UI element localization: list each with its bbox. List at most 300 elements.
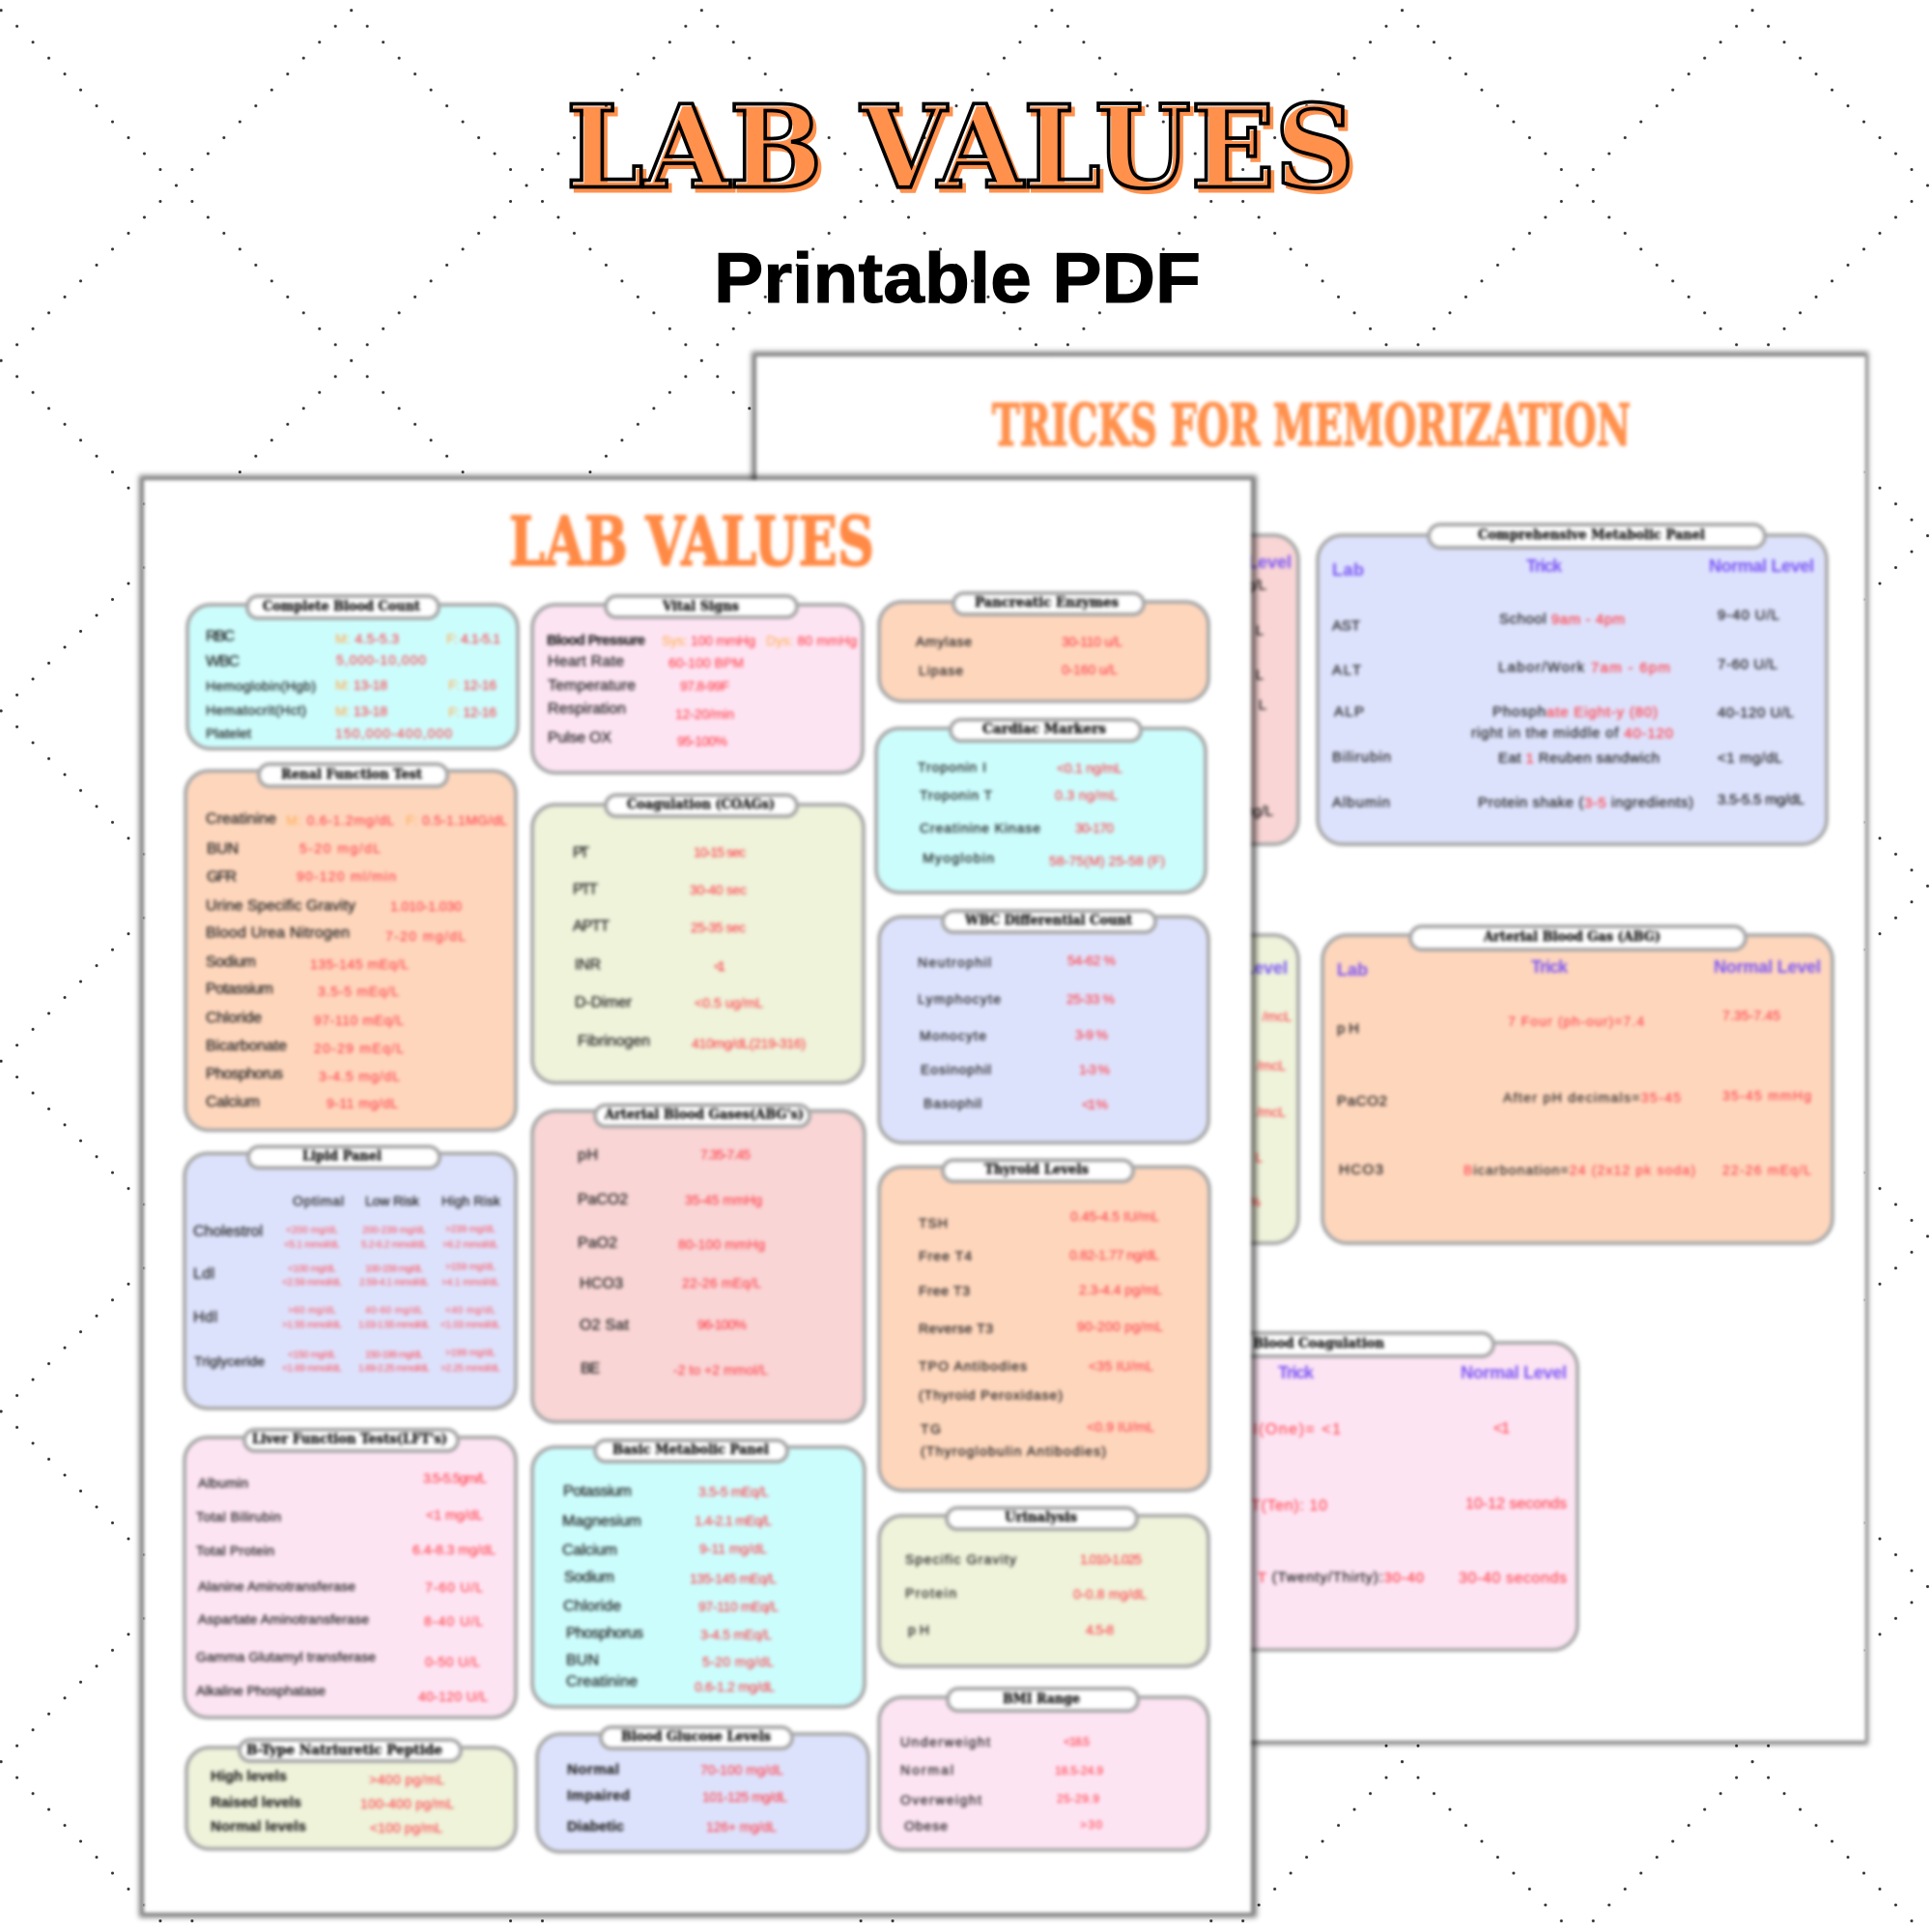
- panel background: [532, 605, 863, 773]
- lab rows: 20-29 mEq/L: [314, 1040, 404, 1056]
- panel: rose panel, mostly hidden: g/L: [1246, 578, 1266, 593]
- lab rows: Potassium: [206, 981, 273, 997]
- lipid rows: Hdl: [193, 1310, 217, 1325]
- panel: rose panel, mostly hidden: L: [1256, 667, 1264, 684]
- panel background: [187, 605, 518, 749]
- lab rows: 126+ mg/dL: [706, 1819, 777, 1834]
- lab rows: Fibrinogen: [578, 1034, 650, 1049]
- panel: WBC differential count: [879, 911, 1208, 1143]
- lab rows: Aspartate Aminotransferase: [198, 1611, 369, 1627]
- lab rows: [211, 1768, 454, 1835]
- panel background: [185, 771, 516, 1130]
- lab rows: BUN: [566, 1652, 599, 1669]
- panel title pill: Renal Function Test: [281, 767, 422, 782]
- table rows: Labor/Work 7am - 6pm: [1498, 659, 1670, 676]
- panel background: [876, 728, 1206, 893]
- lab rows: Pulse OX: [548, 730, 611, 746]
- lipid rows: <200 mg/dL: [286, 1225, 338, 1236]
- table rows: 7-60 U/L: [1718, 657, 1777, 672]
- table rows: [1332, 607, 1804, 811]
- panel: green panel, mostly hidden: [966, 935, 1298, 1243]
- lipid rows: <40 mg/dL: [445, 1306, 496, 1316]
- column headers: High Risk: [441, 1193, 501, 1208]
- lab rows: Sodium: [564, 1569, 614, 1586]
- lab rows: <1: [714, 958, 725, 974]
- lab rows: Hemoglobin(Hgb): [206, 678, 316, 694]
- panel title pill: Pancreatic Enzymes: [975, 595, 1119, 611]
- lipid rows: 40-60 mg/dL: [365, 1306, 423, 1316]
- lab rows: 0.45-4.5 IU/mL: [1070, 1208, 1159, 1224]
- panel title pill: [948, 1689, 1138, 1711]
- lab rows: 35-45 mmHg: [685, 1192, 762, 1208]
- lab rows: [919, 1208, 1163, 1459]
- panel: rose panel, mostly hidden: L: [1259, 697, 1266, 713]
- column headers: Optimal: [293, 1193, 344, 1208]
- lipid rows: Cholestrol: [193, 1223, 263, 1240]
- lab rows: Diabetic: [567, 1818, 624, 1835]
- lab rows: [916, 634, 1122, 678]
- panel title pill: Vital Signs: [662, 599, 739, 614]
- lab rows: PaO2: [578, 1235, 617, 1252]
- lab rows: 22-26 mEq/L: [682, 1275, 761, 1291]
- lab rows: Free T3: [919, 1283, 970, 1298]
- lab rows: 30-170: [1075, 820, 1114, 836]
- lab rows: Basophil: [923, 1095, 981, 1111]
- panel title pill: [244, 1430, 458, 1451]
- lab rows: Eosinophil: [921, 1062, 991, 1077]
- lipid rows: >1.55 mmol/dL: [282, 1320, 342, 1331]
- lab rows: [573, 844, 806, 1051]
- table rows: T(Ten): 10: [1251, 1497, 1327, 1515]
- lab rows: <35 IU/mL: [1089, 1358, 1153, 1374]
- panel: comprehensive metabolic panel: [1318, 525, 1827, 844]
- lab rows: Respiration: [548, 701, 626, 717]
- lab rows: 3.5-5 mEq/L: [698, 1484, 769, 1499]
- lab rows: 5-20 mg/dL: [299, 840, 381, 856]
- lab rows: (Thyroid Peroxidase): [919, 1387, 1063, 1403]
- lab rows: High levels: [211, 1768, 287, 1785]
- lab rows: 97-110 mEq/L: [314, 1012, 404, 1028]
- panel: B-type natriuretic peptide: [186, 1740, 516, 1849]
- panel: rose panel, mostly hidden: Level: [1247, 553, 1292, 572]
- lab rows: 96-100%: [697, 1317, 747, 1332]
- lab rows: Urine Specific Gravity: [206, 898, 355, 914]
- panel title pill: [1140, 1333, 1493, 1356]
- table rows: ALP: [1334, 703, 1364, 721]
- panel: basic metabolic panel: [532, 1440, 865, 1707]
- lab rows: 12-20/min: [675, 706, 734, 722]
- lab rows: INR: [575, 956, 601, 974]
- lab rows: [206, 628, 500, 741]
- panel title pill: Lipid Panel: [302, 1149, 382, 1164]
- panel title pill: Urinalysis: [1005, 1510, 1077, 1525]
- lipid rows: <1.69 mmol/dL: [282, 1364, 342, 1374]
- table rows: Phosphate Eight-y (80): [1492, 703, 1658, 721]
- lab rows: 40-120 U/L: [418, 1689, 488, 1704]
- table header: [1278, 1363, 1567, 1382]
- panel title pill: Liver Function Tests(LFT's): [252, 1432, 447, 1447]
- lipid rows: <2.59 mmol/dL: [282, 1277, 342, 1289]
- lab rows: [918, 759, 1165, 868]
- lab rows: <0.5 ug/mL: [695, 995, 763, 1010]
- table rows: T (Twenty/Thirty):30-40: [1258, 1569, 1424, 1586]
- lab rows: 100-400 pg/mL: [360, 1796, 454, 1811]
- lipid rows: >60 mg/dL: [288, 1306, 336, 1316]
- table header: [1337, 957, 1821, 980]
- panel title pill: [953, 593, 1144, 614]
- lab rows: TPO Antibodies: [919, 1358, 1027, 1374]
- lab rows: Phosphorus: [206, 1066, 283, 1082]
- lab rows: >400 pg/mL: [369, 1772, 444, 1787]
- panel title pill: Blood Glucose Levels: [621, 1729, 771, 1745]
- table rows: pH: [1337, 1020, 1359, 1037]
- lab rows: Bicarbonate: [206, 1037, 287, 1055]
- lab rows: 3-4.5 mEq/L: [700, 1627, 772, 1642]
- lab rows: Impaired: [567, 1787, 630, 1804]
- lab rows: M: 13-18: [335, 703, 387, 719]
- lab rows: Lipase: [919, 663, 963, 678]
- panel title pill: [1410, 926, 1746, 950]
- lab rows: 3.5-5.5gm/L: [423, 1470, 487, 1486]
- lab rows: Free T4: [919, 1248, 972, 1264]
- lipid rows: Ldl: [193, 1265, 214, 1283]
- lab rows: 7.35-7.45: [700, 1147, 751, 1162]
- lab rows: Calcium: [562, 1542, 617, 1559]
- title: LAB VALUES: LAB VALUES: [566, 79, 1354, 214]
- lab rows: [562, 1484, 779, 1694]
- lab rows: [905, 1551, 1147, 1637]
- lab rows: Alkaline Phosphatase: [196, 1683, 326, 1698]
- lab rows: Specific Gravity: [905, 1551, 1016, 1567]
- lab rows: 70-100 mg/dL: [700, 1762, 783, 1777]
- lab rows: Chloride: [563, 1598, 621, 1615]
- lab rows: Blood Urea Nitrogen: [206, 925, 350, 941]
- panel: green panel, mostly hidden: /mcL: [1263, 1009, 1292, 1024]
- lab rows: F: 0.5-1.1MG/dL: [406, 812, 507, 828]
- lab rows: Sys: 100 mmHg: [662, 633, 755, 648]
- lab rows: 18.5-24.9: [1055, 1764, 1103, 1777]
- panel title pill: Thyroid Levels: [984, 1162, 1089, 1178]
- panel background: [879, 1697, 1208, 1850]
- lab rows: Monocyte: [920, 1028, 986, 1043]
- panel title pill: Arterial Blood Gases(ABG's): [604, 1107, 804, 1122]
- panel title pill: Basic Metabolic Panel: [612, 1442, 769, 1458]
- lab rows: BUN: [207, 840, 239, 858]
- lipid rows: <100 mg/dL: [288, 1264, 336, 1275]
- table rows: 10-12 seconds: [1465, 1495, 1567, 1513]
- panel background: [1063, 1343, 1577, 1650]
- panel title pill: Arterial Blood Gas (ABG): [1483, 929, 1661, 945]
- lab rows: 25-35 sec: [691, 920, 746, 935]
- lab rows: F: 12-16: [448, 704, 497, 720]
- lab rows: 0.6-1.2 mg/dL: [695, 1679, 775, 1694]
- panel: vital signs: [532, 596, 863, 773]
- lab rows: 135-145 mEq/L: [690, 1571, 777, 1586]
- front page heading: LAB VALUES: [509, 501, 874, 582]
- lab rows: 1.010-1.025: [1080, 1551, 1142, 1567]
- lab rows: pH: [908, 1622, 929, 1637]
- lab rows: APTT: [573, 918, 610, 935]
- lab rows: Albumin: [198, 1475, 248, 1491]
- panel title pill: Blood Coagulation: [1253, 1336, 1384, 1351]
- panel title pill: [606, 596, 797, 617]
- lipid rows: >4.1 mmol/dL: [441, 1277, 499, 1289]
- panel: green panel, mostly hidden: Level: [1243, 958, 1288, 978]
- panel background: [879, 917, 1208, 1143]
- panel background: [532, 1447, 865, 1707]
- panel title pill: [601, 1727, 792, 1748]
- table rows: Bilirubin: [1332, 750, 1391, 765]
- lab rows: 7-20 mg/dL: [385, 928, 466, 944]
- table rows: PaCO2: [1337, 1094, 1387, 1109]
- panel title pill: [1429, 525, 1765, 548]
- lab rows: 25-33 %: [1066, 991, 1115, 1007]
- back page shadow: [752, 352, 1868, 1745]
- table rows: Protein shake (3-5 ingredients): [1478, 794, 1693, 811]
- lab rows: Heart Rate: [548, 653, 624, 670]
- lipid rows: 1.69-2.25 mmol/dL: [358, 1364, 430, 1374]
- panel title pill: Complete Blood Count: [263, 599, 420, 614]
- lab rows: 2.3-4.4 pg/mL: [1079, 1282, 1162, 1297]
- panel: cardiac markers: [876, 720, 1206, 893]
- lab rows: 80-100 mmHg: [678, 1236, 765, 1252]
- lab rows: 3.5-5 mEq/L: [318, 983, 399, 999]
- lipid rows: <150 mg/dL: [288, 1350, 336, 1360]
- table rows: [1251, 1420, 1567, 1586]
- table rows: School 9am - 4pm: [1499, 611, 1625, 628]
- lab rows: M: 0.6-1.2mg/dL: [286, 812, 394, 828]
- panel background: [185, 1153, 516, 1408]
- lab rows: TG: [921, 1421, 941, 1436]
- lab rows: Normal: [567, 1762, 619, 1777]
- lab rows: 9-11 mg/dL: [327, 1095, 398, 1111]
- lab rows: >30: [1080, 1818, 1102, 1832]
- lipid rows: [193, 1223, 500, 1374]
- panel: pancreatic enzymes: [879, 593, 1208, 701]
- lab rows: 1.4-2.1 mEq/L: [695, 1513, 772, 1528]
- table header: Normal Level: [1709, 556, 1814, 576]
- lab rows: 5-20 mg/dL: [702, 1654, 774, 1669]
- panel background: [537, 1734, 868, 1852]
- lab rows: Chloride: [206, 1010, 262, 1026]
- lab rows: Magnesium: [562, 1513, 641, 1530]
- lab rows: 410mg/dL(219-316): [692, 1036, 806, 1051]
- lab rows: [900, 1734, 1103, 1833]
- table rows: 9-40 U/L: [1718, 607, 1779, 624]
- table rows: <1 mg/dL: [1718, 750, 1782, 767]
- lab rows: HCO3: [580, 1275, 623, 1293]
- panel background: [186, 1747, 516, 1849]
- panel title pill: WBC Differential Count: [964, 913, 1132, 928]
- table rows: [1337, 1008, 1811, 1179]
- lab rows: WBC: [206, 653, 240, 670]
- panel background: [532, 1111, 865, 1422]
- lab rows: RBC: [206, 628, 235, 645]
- panel: coagulation: [532, 795, 864, 1083]
- lab rows: F: 12-16: [448, 677, 497, 693]
- lab rows: Hematocrit(Hct): [206, 702, 306, 718]
- lab rows: Creatinine Kinase: [920, 820, 1040, 836]
- page: tricks for memorization: [756, 356, 1865, 1741]
- lab rows: O2 Sat: [580, 1318, 630, 1333]
- table rows: 22-26 mEq/L: [1722, 1162, 1811, 1178]
- panel: rose panel, mostly hidden: [966, 535, 1298, 844]
- panel: urinalysis: [879, 1508, 1208, 1666]
- panel title pill: [595, 1440, 787, 1462]
- lab rows: 5,000-10,000: [336, 652, 426, 668]
- lab rows: 0.3 ng/mL: [1055, 787, 1118, 803]
- lab rows: -2 to +2 mmol/L: [673, 1362, 768, 1378]
- panel: renal function test: [185, 764, 516, 1130]
- lab rows: <0.9 IU/mL: [1087, 1419, 1154, 1435]
- lab rows: 54-62 %: [1067, 952, 1116, 968]
- panel: green panel, mostly hidden: /mcL: [1257, 1058, 1286, 1073]
- panel background: [532, 805, 864, 1083]
- lab rows: Total Protein: [196, 1543, 274, 1558]
- lipid rows: Triglyceride: [194, 1353, 265, 1369]
- lipid rows: 1.03-1.55 mmol/dL: [358, 1320, 430, 1331]
- lab rows: 3-9 %: [1075, 1027, 1108, 1042]
- lipid rows: 5.2-6.2 mmol/dL: [361, 1240, 427, 1250]
- panel background: [879, 1516, 1208, 1666]
- lab rows: 3-4.5 mg/dL: [319, 1068, 400, 1084]
- lab rows: 0-160 u/L: [1062, 662, 1118, 677]
- table rows: AST: [1332, 618, 1360, 634]
- lab rows: 150,000-400,000: [335, 725, 452, 741]
- lab rows: 58-75(M) 25-58 (F): [1049, 853, 1165, 868]
- panel: rose panel, mostly hidden: L: [1256, 622, 1264, 639]
- lab rows: M: 13-18: [335, 677, 387, 693]
- lab rows: Obese: [904, 1818, 948, 1833]
- lipid rows: <1.03 mmol/dL: [440, 1320, 500, 1331]
- lab rows: Calcium: [206, 1094, 260, 1111]
- lab rows: Underweight: [900, 1734, 990, 1749]
- panel title pill: [951, 720, 1141, 741]
- panel title pill: [947, 1508, 1137, 1529]
- lab rows: Troponin I: [918, 759, 986, 775]
- panel background: [1318, 535, 1827, 844]
- lab rows: Reverse T3: [919, 1321, 993, 1336]
- lab rows: Gamma Glutamyl transferase: [196, 1649, 376, 1664]
- lab rows: Temperature: [548, 678, 636, 694]
- lipid rows: 100-159 mg/dL: [365, 1264, 423, 1275]
- lab rows: [547, 632, 857, 749]
- lab rows: <1 mg/dL: [426, 1507, 483, 1522]
- panel title pill: [240, 1740, 461, 1761]
- table rows: 7.35-7.45: [1722, 1008, 1780, 1023]
- lab rows: TSH: [919, 1215, 948, 1231]
- lab rows: 9-11 mg/dL: [699, 1541, 767, 1556]
- panel: thyroid levels: [879, 1160, 1209, 1491]
- lab rows: 10-15 sec: [694, 844, 746, 860]
- table header: Lab: [1337, 960, 1368, 980]
- panel title pill: [247, 596, 439, 618]
- lab rows: Creatinine: [206, 811, 276, 827]
- lab rows: F: 4.1-5.1: [446, 631, 500, 646]
- panel: blood glucose levels: [537, 1727, 868, 1852]
- lab rows: <1 %: [1082, 1096, 1108, 1112]
- panel: green panel, mostly hidden: %: [1249, 1194, 1261, 1209]
- panel title pill: [248, 1147, 440, 1168]
- lab rows: 0-0.8 mg/dL: [1073, 1586, 1147, 1602]
- panel background: [879, 602, 1208, 701]
- lab rows: <0.1 ng/mL: [1057, 760, 1122, 776]
- lab rows: PTT: [573, 881, 598, 898]
- panel background: [879, 1167, 1209, 1491]
- lab rows: 135-145 mEq/L: [310, 956, 409, 972]
- lipid rows: 2.59-4.1 mmol/dL: [359, 1277, 429, 1289]
- panel: complete blood count: [187, 596, 518, 749]
- table rows: Eat 1 Reuben sandwich: [1498, 750, 1660, 767]
- table rows: Albumin: [1332, 794, 1390, 811]
- panel title pill: Cardiac Markers: [982, 722, 1106, 737]
- column headers: [293, 1193, 501, 1208]
- lab rows: 95-100%: [677, 733, 727, 749]
- lab rows: <100 pg/mL: [370, 1820, 442, 1835]
- table rows: <1: [1493, 1420, 1510, 1437]
- table rows: right in the middle of 40-120: [1471, 724, 1673, 742]
- panel title pill: [259, 764, 447, 786]
- table header: Trick: [1531, 957, 1569, 977]
- lab rows: M: 4.5-5.3: [335, 631, 399, 646]
- table header: [1332, 556, 1814, 580]
- panel: green panel, mostly hidden: L: [1255, 1150, 1263, 1165]
- lab rows: pH: [578, 1148, 598, 1163]
- table rows: 30-40 seconds: [1459, 1571, 1567, 1586]
- lab rows: 8-40 U/L: [424, 1613, 483, 1629]
- panel title pill: [943, 911, 1155, 932]
- lab rows: 25-29.9: [1057, 1792, 1099, 1805]
- table rows: Bicarbonation=24 (2x12 pk soda): [1463, 1162, 1695, 1178]
- lab rows: Raised levels: [211, 1795, 301, 1810]
- lab rows: Phosphorus: [566, 1625, 643, 1642]
- lipid rows: >199 mg/dL: [445, 1349, 496, 1358]
- lab rows: BE: [581, 1360, 600, 1378]
- subtitle: Printable PDF: Printable PDF: [714, 240, 1201, 318]
- lab rows: 90-200 pg/mL: [1077, 1319, 1163, 1334]
- table rows: I(One)= <1: [1253, 1422, 1341, 1437]
- page: lab values: [144, 480, 1251, 1913]
- lipid rows: 200-239 mg/dL: [362, 1225, 426, 1236]
- lab rows: [206, 811, 507, 1111]
- table rows: After pH decimals=35-45: [1503, 1090, 1681, 1105]
- lab rows: Overweight: [900, 1792, 981, 1807]
- title: LAB VALUES: LAB VALUES: [570, 84, 1358, 218]
- lab rows: PaCO2: [578, 1192, 628, 1208]
- table header: Trick: [1526, 556, 1563, 576]
- lab rows: Alanine Aminotransferase: [198, 1578, 355, 1594]
- lab rows: 97-110 mEq/L: [698, 1599, 779, 1614]
- lab rows: 0-50 U/L: [425, 1654, 480, 1669]
- table rows: HCO3: [1339, 1161, 1383, 1179]
- panel background: [185, 1437, 516, 1718]
- lab rows: Normal: [900, 1762, 953, 1777]
- lipid rows: <5.1 mmol/dL: [284, 1240, 340, 1250]
- lab rows: Amylase: [916, 634, 972, 649]
- lab rows: Platelet: [206, 725, 251, 741]
- panel title pill: BMI Range: [1003, 1691, 1080, 1707]
- lab rows: Creatinine: [566, 1673, 638, 1690]
- panel: rose panel, mostly hidden: mg/L: [1241, 804, 1273, 819]
- lab rows: Troponin T: [920, 787, 992, 803]
- table header: Lab: [1332, 560, 1364, 580]
- lab rows: 101-125 mg/dL: [702, 1789, 787, 1804]
- lab rows: [196, 1470, 496, 1704]
- lab rows: Blood Pressure: [547, 632, 645, 649]
- lab rows: PT: [573, 844, 589, 862]
- panel: arterial blood gases: [532, 1105, 865, 1422]
- table header: Normal Level: [1714, 957, 1821, 977]
